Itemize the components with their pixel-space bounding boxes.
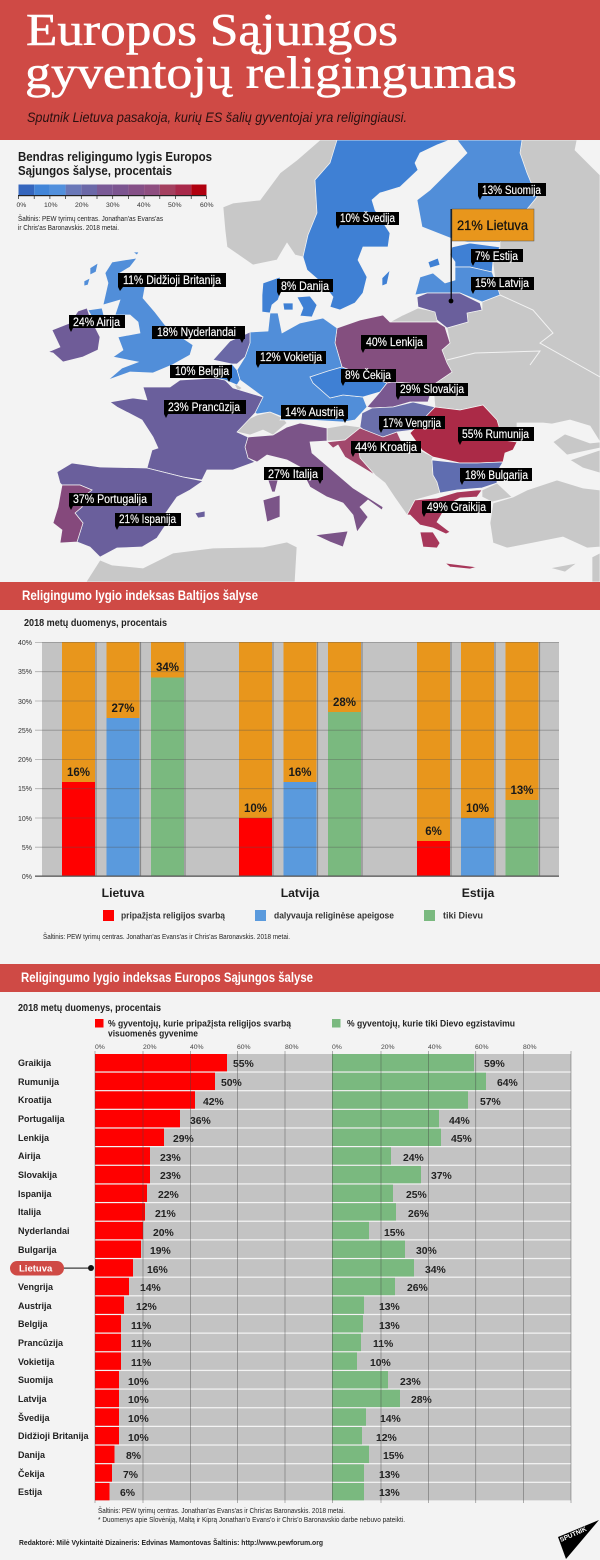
row: Graikija <box>18 1054 571 1071</box>
EU chart axis labels: 80% <box>285 1044 299 1051</box>
section band: EU countries <box>0 964 600 992</box>
Ireland <box>48 308 100 362</box>
row: Kroatija <box>18 1091 571 1109</box>
Baltic bar chart <box>18 640 559 881</box>
United Kingdom <box>84 252 193 380</box>
row: Čekija: Čekija <box>18 1468 46 1479</box>
row: Ispanija <box>18 1185 571 1202</box>
row: Didžioji Britanija: 12% <box>376 1433 397 1444</box>
bars: Estija <box>417 642 540 876</box>
row: Suomija: Suomija <box>18 1375 54 1385</box>
row: Ispanija: Ispanija <box>18 1189 53 1199</box>
label: Rumunija: 55% Rumunija <box>462 429 530 441</box>
section band: Baltic states <box>0 582 600 610</box>
row: Danija: 15% <box>383 1451 404 1462</box>
row: Slovakija: Slovakija <box>18 1170 58 1180</box>
EU chart axis labels: 0% <box>95 1044 105 1051</box>
EU chart axis labels: 40% <box>428 1044 442 1051</box>
label: Rumunija <box>458 427 534 445</box>
row: Danija: 8% <box>126 1451 141 1462</box>
map source note: ir Chris'as Baronavskis. 2018 metai. <box>18 225 119 232</box>
label: Latvija <box>471 277 534 294</box>
EU chart source notes: * Duomenys apie Slovėniją, Maltą ir Kiprą Jonathan'o Evans'o ir Chris'o Baronavskio darbe nebuvo pateikti. <box>98 1517 405 1524</box>
row: Airija: 23% <box>160 1153 181 1164</box>
row: Bulgarija: 30% <box>416 1246 437 1257</box>
row: Vengrija: 26% <box>407 1283 428 1294</box>
row: Prancūzija: 11% <box>131 1339 151 1350</box>
label: Slovakija <box>396 383 468 400</box>
EU chart legend: % gyventojų, kurie pripažįsta religijos svarbą <box>108 1018 292 1028</box>
subtitle: Sputnik Lietuva pasakoja, kurių ES šalių gyventojai yra religingiausi. <box>27 109 407 125</box>
icon: Sputnik logo: SPUTNIK <box>559 1526 588 1544</box>
label: Nyderlandai: 18% Nyderlandai <box>157 327 236 339</box>
bar value labels: 6% <box>425 826 442 838</box>
row: Graikija: 59% <box>484 1059 505 1070</box>
icon: Sputnik logo <box>558 1520 599 1559</box>
label: Ispanija <box>115 513 181 530</box>
bar value labels: 13% <box>510 785 534 797</box>
bar value labels: 27% <box>111 703 135 715</box>
row: Prancūzija <box>18 1334 571 1351</box>
row: Didžioji Britanija: 10% <box>128 1433 149 1444</box>
label: Slovakija: 29% Slovakija <box>400 384 465 396</box>
bar value labels: 16% <box>67 767 90 779</box>
EU chart axis labels: 80% <box>523 1044 537 1051</box>
row: Kroatija: 42% <box>203 1097 224 1108</box>
EU chart axis labels <box>95 1044 537 1051</box>
row: Lenkija: 45% <box>451 1134 472 1145</box>
Baltic country labels: Lietuva <box>102 886 145 900</box>
EU chart axis labels: 60% <box>475 1044 489 1051</box>
y axis labels: 15% <box>18 786 32 793</box>
row: Belgija: 11% <box>131 1321 151 1332</box>
EU chart legend <box>95 1018 515 1038</box>
label: Kroatija <box>351 441 421 457</box>
row: Latvija: 28% <box>411 1395 432 1406</box>
label: Latvija: 15% Latvija <box>475 278 530 290</box>
row: Slovakija <box>18 1166 571 1183</box>
France <box>110 378 263 480</box>
row: Latvija: Latvija <box>18 1394 48 1404</box>
row: Vokietija: Vokietija <box>18 1357 55 1367</box>
EU chart source notes: Šaltinis: PEW tyrimų centras. Jonathan'as Evans'as ir Chris'as Baronavskis. 2018 metai. <box>98 1506 345 1515</box>
EU chart legend: % gyventojų, kurie tiki Dievo egzistavimu <box>347 1018 515 1028</box>
row: Rumunija <box>18 1073 571 1090</box>
row: Portugalija: 44% <box>449 1116 470 1127</box>
row: Vengrija: Vengrija <box>18 1282 54 1292</box>
row: Švedija: 14% <box>380 1414 401 1425</box>
row: Vokietija: 10% <box>370 1358 391 1369</box>
map heading <box>18 150 212 178</box>
bar value labels: 10% <box>466 803 489 815</box>
bar value labels: 28% <box>333 697 356 709</box>
Denmark <box>262 277 317 317</box>
row: Portugalija <box>18 1110 571 1127</box>
y axis labels <box>18 640 32 881</box>
label: Bulgarija <box>460 468 532 485</box>
Baltic country labels <box>102 886 494 900</box>
label: Austrija: 14% Austrija <box>285 407 345 419</box>
Baltic islands <box>428 258 440 268</box>
Croatia <box>327 428 403 475</box>
Poland <box>335 315 452 385</box>
Lietuva highlight marker: Lietuva <box>19 1264 53 1274</box>
row: Nyderlandai: 20% <box>153 1228 174 1239</box>
row: Estija: 13% <box>379 1488 400 1499</box>
row: Didžioji Britanija <box>18 1427 571 1444</box>
map source note: Šaltinis: PEW tyrimų centras. Jonathan'as Evans'as <box>18 214 163 223</box>
Portugal <box>53 485 92 543</box>
row: Rumunija: 50% <box>221 1078 242 1089</box>
map legend colour scale: 40% <box>137 202 151 209</box>
label: Suomija: 13% Suomija <box>482 185 542 197</box>
label: Italija <box>264 467 323 484</box>
row: Slovakija: 37% <box>431 1171 452 1182</box>
label: Vengrija <box>379 416 445 433</box>
row: Italija: 26% <box>408 1209 429 1220</box>
map legend colour scale <box>16 184 214 209</box>
row: Vokietija: 11% <box>131 1358 151 1369</box>
map of Europe <box>48 140 600 582</box>
map legend colour scale: 0% <box>16 202 26 209</box>
label: Vokietija: 12% Vokietija <box>260 352 323 364</box>
label: Vokietija <box>256 351 326 368</box>
row: Belgija: Belgija <box>18 1319 49 1329</box>
title <box>25 4 517 98</box>
y axis labels: 40% <box>18 640 32 647</box>
label: Didžioji Britanija <box>118 273 226 291</box>
bar value labels: 34% <box>156 662 179 674</box>
gridlines <box>35 642 559 847</box>
row: Kroatija: Kroatija <box>18 1095 53 1105</box>
Romania <box>410 405 517 463</box>
Sweden <box>303 140 450 310</box>
bar value labels: 16% <box>288 767 312 779</box>
label: Italija: 27% Italija <box>268 469 319 481</box>
row: Lenkija: 29% <box>173 1134 194 1145</box>
row: Airija <box>18 1147 571 1165</box>
row: Suomija <box>18 1371 571 1388</box>
EU bar chart <box>18 1051 571 1503</box>
row: Belgija: 13% <box>379 1321 400 1332</box>
label: Didžioji Britanija: 11% Didžioji Britanija <box>123 275 222 287</box>
row: Lenkija <box>18 1129 571 1146</box>
Italy <box>245 423 383 547</box>
gridlines <box>95 1051 571 1503</box>
label: Estija: 7% Estija <box>475 251 519 263</box>
label: Ispanija: 21% Ispanija <box>119 514 177 526</box>
row: Nyderlandai: 15% <box>384 1228 405 1239</box>
map legend colour scale: 10% <box>44 202 58 209</box>
Baltic country labels: Estija <box>462 886 494 900</box>
row: Belgija <box>18 1315 571 1332</box>
row: Lietuva <box>95 1259 571 1277</box>
row: Kroatija: 57% <box>480 1097 501 1108</box>
label: Prancūzija <box>164 400 246 418</box>
row: Slovakija: 23% <box>160 1171 181 1182</box>
label: Austrija <box>281 405 348 423</box>
row: Čekija: 7% <box>123 1470 138 1481</box>
Baltic chart legend: dalyvauja religinėse apeigose <box>274 910 394 922</box>
row: Graikija: Graikija <box>18 1058 52 1068</box>
label: Bulgarija: 18% Bulgarija <box>465 470 529 482</box>
row: Estija <box>18 1483 571 1500</box>
callout: Lietuva flag: 21% Lietuva <box>457 217 528 233</box>
row: Austrija <box>18 1296 571 1314</box>
Belgium <box>213 364 240 385</box>
row: Suomija: 23% <box>400 1377 421 1388</box>
row: Danija <box>18 1446 571 1463</box>
Greece <box>407 490 482 569</box>
Netherlands <box>213 332 250 364</box>
EU chart axis labels: 20% <box>381 1044 395 1051</box>
row: Estija: 6% <box>120 1488 135 1499</box>
label: Danija: 8% Danija <box>281 281 330 293</box>
bar value labels <box>67 662 534 838</box>
callout: Lietuva flag <box>449 209 534 303</box>
map source note <box>18 214 163 232</box>
bar value labels: 10% <box>244 803 267 815</box>
row: Vengrija <box>18 1278 571 1295</box>
map legend colour scale: 20% <box>75 202 89 209</box>
label: Lenkija: 40% Lenkija <box>366 337 424 349</box>
Estonia <box>450 243 500 272</box>
row: Vengrija: 14% <box>140 1283 161 1294</box>
label: Danija <box>277 279 333 296</box>
bars: Latvija <box>239 642 362 876</box>
label: Portugalija <box>69 493 152 510</box>
label: Airija <box>69 315 125 332</box>
Czechia <box>310 367 387 398</box>
Baltic chart source: Šaltinis: PEW tyrimų centras. Jonathan'as Evans'as ir Chris'as Baronavskis. 2018 metai. <box>43 932 290 941</box>
Baltic chart legend <box>103 910 483 922</box>
bars: Lietuva <box>62 642 185 876</box>
Eastern borders <box>500 295 600 377</box>
label: Kroatija: 44% Kroatija <box>355 442 418 454</box>
title: Europos Sąjungos <box>26 4 398 55</box>
row: Nyderlandai: Nyderlandai <box>18 1226 70 1236</box>
row: Portugalija: Portugalija <box>18 1114 66 1124</box>
label: Suomija <box>478 183 546 200</box>
Hungary <box>360 402 435 437</box>
map heading: Sąjungos šalyse, procentais <box>18 164 172 178</box>
row: Čekija <box>18 1464 571 1482</box>
Lietuva highlight marker <box>10 1261 94 1276</box>
Baltic chart legend: tiki Dievu <box>443 910 483 922</box>
EU chart axis labels: 0% <box>332 1044 342 1051</box>
row: Latvija <box>18 1390 571 1407</box>
row: Čekija: 13% <box>379 1470 400 1481</box>
Finland <box>417 140 537 242</box>
row: Suomija: 10% <box>128 1377 149 1388</box>
row: Lenkija: Lenkija <box>18 1133 50 1143</box>
row: Švedija <box>18 1408 571 1426</box>
label: Graikija <box>422 501 491 517</box>
row: Nyderlandai <box>18 1222 571 1239</box>
row: Prancūzija: Prancūzija <box>18 1338 64 1348</box>
row: Latvija: 10% <box>128 1395 149 1406</box>
label: Airija: 24% Airija <box>73 317 121 329</box>
row: Austrija: 12% <box>136 1302 157 1313</box>
label: Belgija: 10% Belgija <box>175 366 230 378</box>
label: Švedija <box>336 212 399 229</box>
row: Prancūzija: 11% <box>373 1339 393 1350</box>
y axis labels: 35% <box>18 669 32 676</box>
Latvia <box>415 267 500 302</box>
row: Švedija: 10% <box>128 1414 149 1425</box>
row: Ispanija: 25% <box>406 1190 427 1201</box>
EU chart source notes <box>98 1506 405 1524</box>
label: Prancūzija: 23% Prancūzija <box>168 402 241 414</box>
label: Vengrija: 17% Vengrija <box>383 418 442 430</box>
row: Ispanija: 22% <box>158 1190 179 1201</box>
Spain <box>57 463 205 557</box>
y axis labels: 0% <box>22 874 32 881</box>
EU chart axis labels: 20% <box>143 1044 157 1051</box>
row: Rumunija: Rumunija <box>18 1077 60 1087</box>
Slovakia <box>367 382 433 408</box>
label: Nyderlandai <box>152 326 245 343</box>
section band: EU countries: Religingumo lygio indeksas Europos Sąjungos šalyse <box>21 970 313 985</box>
row: Bulgarija: Bulgarija <box>18 1245 58 1255</box>
row: Lietuva: 34% <box>425 1265 446 1276</box>
label: Čekija <box>341 369 396 386</box>
label: Estija <box>471 249 523 266</box>
Lithuania <box>417 293 482 328</box>
row: Estija: Estija <box>18 1487 43 1497</box>
EU chart legend: visuomenės gyvenime <box>108 1028 198 1038</box>
Baltic country labels: Latvija <box>281 886 320 900</box>
row: Lietuva: 16% <box>147 1265 168 1276</box>
map heading: Bendras religingumo lygis Europos <box>18 150 212 164</box>
row: Portugalija: 36% <box>190 1116 211 1127</box>
row: Italija <box>18 1203 571 1221</box>
label: Graikija: 49% Graikija <box>427 502 487 514</box>
row: Bulgarija <box>18 1240 571 1258</box>
Baltic chart subtitle: 2018 metų duomenys, procentais <box>24 617 167 629</box>
row: Rumunija: 64% <box>497 1078 518 1089</box>
row: Italija: Italija <box>18 1207 42 1217</box>
header band <box>0 0 600 140</box>
EU chart axis labels: 60% <box>237 1044 251 1051</box>
EU chart subtitle: 2018 metų duomenys, procentais <box>18 1002 161 1014</box>
map legend colour scale: 30% <box>106 202 120 209</box>
label: Lenkija <box>361 335 427 353</box>
row: Italija: 21% <box>155 1209 176 1220</box>
row: Airija: Airija <box>18 1151 42 1161</box>
row: Austrija: 13% <box>379 1302 400 1313</box>
EU chart axis labels: 40% <box>190 1044 204 1051</box>
row: Vokietija <box>18 1352 571 1370</box>
label: Belgija <box>170 365 232 382</box>
row: Austrija: Austrija <box>18 1301 53 1311</box>
Germany and Austria <box>237 313 367 422</box>
label: Čekija: 8% Čekija <box>345 369 392 382</box>
y axis labels: 10% <box>18 816 32 823</box>
credits: Redaktorė: Milė Vykintaitė Dizaineris: Edvinas Mamontovas Šaltinis: http://www.pewforum.org <box>19 1538 323 1547</box>
label: Švedija: 10% Švedija <box>340 212 396 225</box>
gray non-EU territory <box>86 140 600 582</box>
y axis labels: 25% <box>18 728 32 735</box>
y axis labels: 30% <box>18 699 32 706</box>
row: Airija: 24% <box>403 1153 424 1164</box>
row: Bulgarija: 19% <box>150 1246 171 1257</box>
y axis labels: 20% <box>18 757 32 764</box>
Baltic chart legend: pripažįsta religijos svarbą <box>121 910 226 922</box>
row: Graikija: 55% <box>233 1059 254 1070</box>
row: Danija: Danija <box>18 1450 46 1460</box>
title: gyventojų religingumas <box>25 47 517 98</box>
Bulgaria <box>432 460 503 493</box>
map legend colour scale: 60% <box>200 202 214 209</box>
row: Didžioji Britanija: Didžioji Britanija <box>18 1431 90 1441</box>
label: Portugalija: 37% Portugalija <box>73 494 148 506</box>
map legend colour scale: 50% <box>168 202 182 209</box>
section band: Baltic states: Religingumo lygio indeksas Baltijos šalyse <box>22 588 258 603</box>
y axis labels: 5% <box>22 845 32 852</box>
row: Švedija: Švedija <box>18 1412 51 1423</box>
